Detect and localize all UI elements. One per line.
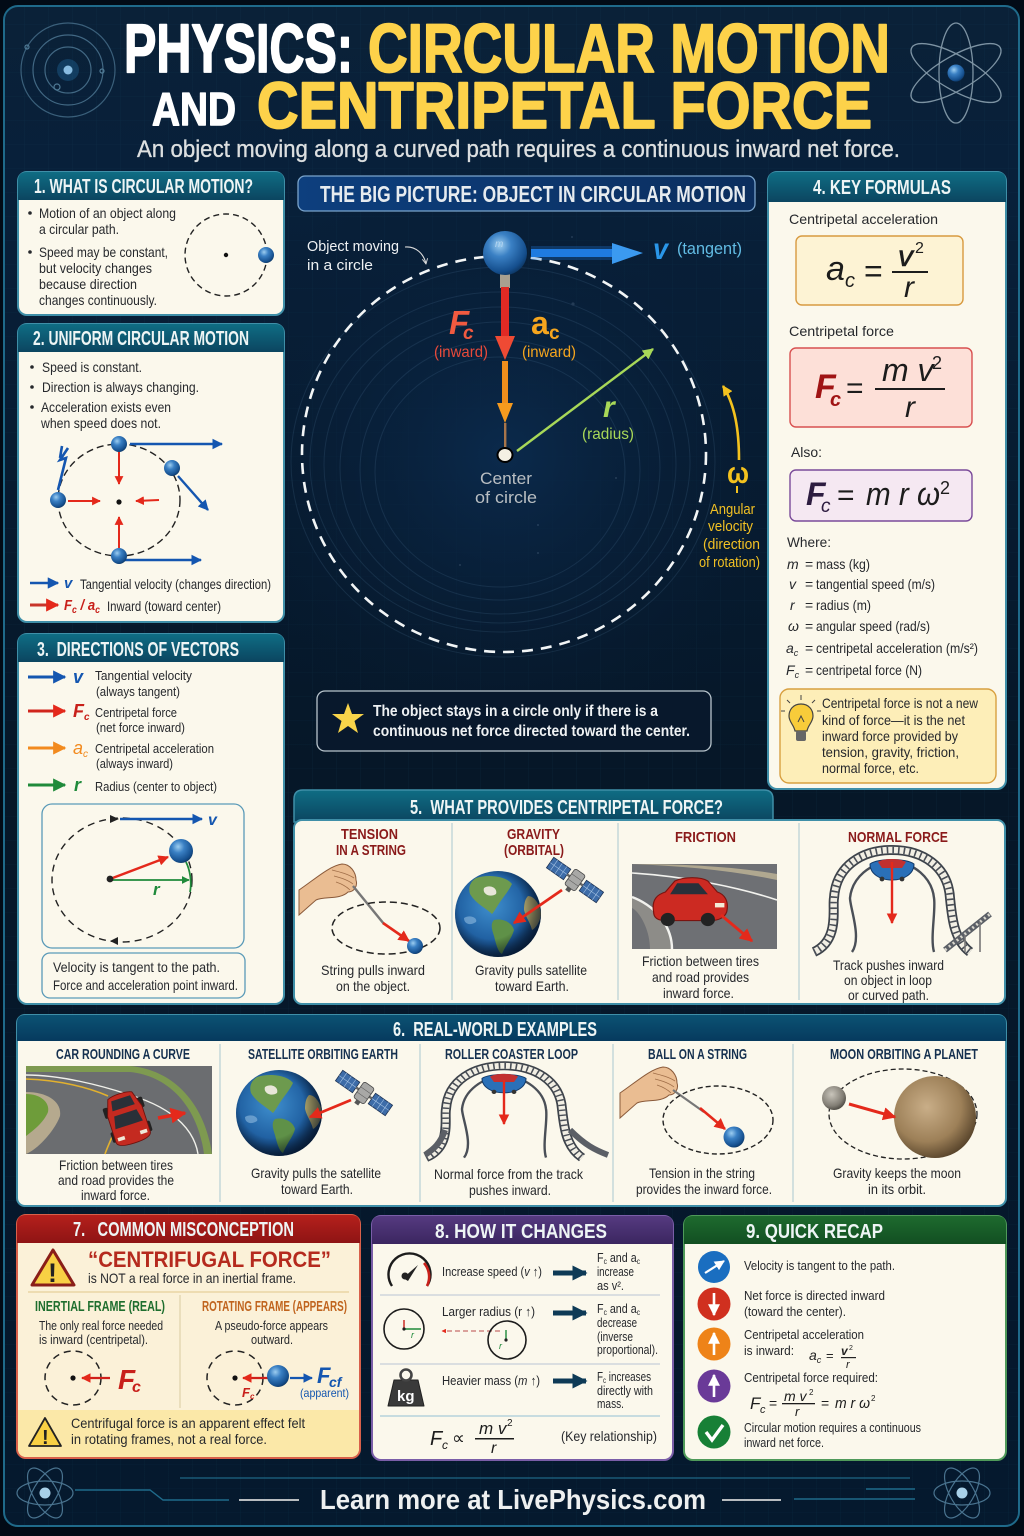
panel: the big picture <box>291 176 760 751</box>
variable definitions: v <box>789 576 797 592</box>
heading 8: 8. HOW IT CHANGES <box>435 1221 607 1243</box>
key relationship formula: m v <box>479 1419 508 1438</box>
panel 9: quick recap <box>684 1216 1006 1460</box>
example: car: Friction between tires <box>59 1157 173 1173</box>
vector legend: Centripetal force <box>95 705 177 720</box>
text block 1: but velocity changes <box>39 260 152 276</box>
text block 1: Motion of an object along <box>39 205 176 221</box>
icon: atom right <box>934 1463 990 1523</box>
recap 4: force: 2 <box>871 1394 876 1403</box>
row: radius <box>384 1301 658 1359</box>
rotating frame: c <box>250 1392 255 1401</box>
key relationship formula: (Key relationship) <box>561 1428 657 1444</box>
label: ac <box>522 305 576 361</box>
angular velocity: velocity <box>708 518 753 535</box>
formula box: force: 2 <box>932 353 942 373</box>
example: roller coaster: pushes inward. <box>469 1182 551 1198</box>
label: Fc: c <box>463 323 474 344</box>
vector legend: Centripetal acceleration <box>95 741 214 756</box>
variable definitions: = <box>805 618 813 634</box>
example: car <box>26 1046 212 1203</box>
row: speed: as v². <box>597 1278 624 1293</box>
recap 5: check: inward net force. <box>744 1435 824 1450</box>
vector legend: a <box>73 738 83 758</box>
angular velocity: ω <box>727 457 749 490</box>
dashed circular path <box>302 256 706 652</box>
text block 1 <box>28 205 176 308</box>
recap 5: check <box>698 1416 921 1450</box>
recap 4: force: = <box>821 1395 829 1411</box>
formula box: acceleration <box>796 236 963 305</box>
angular velocity: Angular <box>710 501 755 518</box>
column: friction: and road provides <box>652 969 749 985</box>
radius arrow <box>517 349 653 451</box>
column: friction <box>632 829 777 1001</box>
column: friction: FRICTION <box>675 829 736 846</box>
inertial frame: The only real force needed <box>39 1318 163 1333</box>
rotating frame: ROTATING FRAME (APPEARS) <box>202 1298 347 1315</box>
vector legend <box>28 667 217 795</box>
vector diagram <box>42 804 244 948</box>
vector legend: Tangential velocity <box>95 668 192 683</box>
recap 2: net force: Net force is directed inward <box>744 1288 885 1303</box>
vector diagram: r <box>153 880 161 899</box>
row: mass: increases <box>606 1369 651 1384</box>
text block 2: Speed is constant. <box>42 359 142 375</box>
example: satellite: SATELLITE ORBITING EARTH <box>248 1046 398 1063</box>
caption box: Velocity is tangent to the path. <box>53 959 220 975</box>
recap 4: force: F <box>750 1394 762 1413</box>
warning note: Centrifugal force is an apparent effect felt <box>71 1415 305 1431</box>
text block 1: because direction <box>39 276 137 292</box>
text block 2 <box>30 359 199 431</box>
text block 1: Speed may be constant, <box>39 244 168 260</box>
formula box: omega: c <box>821 496 831 517</box>
legend: c <box>72 605 77 616</box>
recap 1: velocity: Velocity is tangent to the path. <box>744 1258 895 1273</box>
example: car: CAR ROUNDING A CURVE <box>56 1046 190 1063</box>
icon: atom left <box>17 1463 73 1523</box>
example: moon: in its orbit. <box>868 1181 926 1197</box>
formula box: force: m v <box>882 352 936 388</box>
label: ac: a <box>531 305 549 341</box>
angular velocity <box>699 386 760 571</box>
title: CENTRIPETAL FORCE <box>257 68 872 142</box>
rotating frame: outward. <box>251 1332 293 1347</box>
row: speed: Increase speed (v ↑) <box>442 1264 542 1279</box>
heading 5: 5. WHAT PROVIDES CENTRIPETAL FORCE? <box>410 797 723 819</box>
callout: stays in a circle <box>317 691 711 751</box>
heading 4: 4. KEY FORMULAS <box>813 177 951 199</box>
row: mass: mass. <box>597 1396 624 1411</box>
recap 4: force: Centripetal force required: <box>744 1370 878 1385</box>
warning note: in rotating frames, not a real force. <box>71 1431 267 1447</box>
column: gravity <box>455 826 605 994</box>
row: mass: kg <box>397 1388 415 1405</box>
key relationship formula <box>430 1418 657 1457</box>
label: ac: (inward) <box>522 344 576 361</box>
key relationship formula: 2 <box>507 1418 513 1429</box>
vector legend: F <box>73 701 84 721</box>
faint rings and stars <box>291 236 715 657</box>
title <box>124 10 890 142</box>
recap 4: force: 2 <box>809 1388 814 1397</box>
variable definitions: F <box>786 662 795 678</box>
force arrow <box>495 272 515 360</box>
vector legend: (net force inward) <box>96 720 185 735</box>
recap 4: force: c <box>760 1404 766 1416</box>
variable definitions: centripetal acceleration (m/s²) <box>816 640 978 656</box>
label: also: Also: <box>791 444 822 460</box>
footer <box>17 1463 990 1523</box>
vector legend: r <box>74 775 82 795</box>
inertial frame: is inward (centripetal). <box>39 1332 148 1347</box>
warning note: ! <box>42 1427 49 1449</box>
formula box: acceleration: = <box>864 253 883 289</box>
legend: Tangential velocity (changes direction) <box>80 576 271 592</box>
column: tension: TENSION <box>341 826 398 843</box>
misconception statement <box>88 1247 331 1286</box>
row: radius: Larger radius (r ↑) <box>442 1304 535 1319</box>
column: normal force: on object in loop <box>844 972 932 988</box>
recap 3: acceleration: 2 <box>849 1345 853 1352</box>
column: tension <box>299 826 440 994</box>
callout: stays in a circle: The object stays in a circle only if there is a <box>373 703 658 720</box>
caption box <box>42 953 245 998</box>
vector legend: c <box>83 749 88 760</box>
rotating frame: F <box>317 1363 331 1388</box>
subtitle: An object moving along a curved path requires a continuous inward net force. <box>137 136 900 163</box>
row: radius: and a <box>607 1301 637 1316</box>
callout text: Centripetal force is not a new <box>822 695 979 711</box>
row: mass <box>388 1369 653 1411</box>
formula box: force: r <box>905 391 916 424</box>
row: radius: r <box>499 1341 503 1351</box>
text block 1: changes continuously. <box>39 292 157 308</box>
variable definitions: = <box>805 640 813 656</box>
variable definitions: = <box>805 662 813 678</box>
rotating frame: cf <box>329 1374 343 1390</box>
label: Fc: F <box>449 304 470 341</box>
variable definitions: c <box>794 648 799 658</box>
warning icon: ! <box>48 1258 57 1288</box>
example: ball on a string <box>620 1046 773 1197</box>
inertial frame: F <box>118 1364 136 1395</box>
rotating frame: A pseudo-force appears <box>215 1318 328 1333</box>
formula box: acceleration: 2 <box>915 240 924 257</box>
row: speed <box>388 1250 640 1293</box>
diagram: four positions with velocity and force arrows <box>50 436 222 564</box>
center of circle: of circle <box>475 488 537 507</box>
formula box: acceleration: a <box>826 250 845 288</box>
footer text: Learn more at LivePhysics.com <box>320 1484 706 1515</box>
heading 6: 6. REAL-WORLD EXAMPLES <box>393 1019 597 1041</box>
example: car: inward force. <box>81 1187 150 1203</box>
recap 3: acceleration: a <box>809 1347 817 1363</box>
column: gravity: toward Earth. <box>495 978 569 994</box>
vector legend: v <box>73 667 84 687</box>
example: satellite: Gravity pulls the satellite <box>251 1165 381 1181</box>
column: gravity: GRAVITY <box>507 826 560 843</box>
misconception statement: is NOT a real force in an inertial frame. <box>88 1270 296 1286</box>
panel 1: what is circular motion <box>18 172 284 315</box>
variable definitions: angular speed (rad/s) <box>816 618 930 634</box>
legend: v <box>64 575 74 592</box>
recap 3: acceleration: v <box>841 1344 849 1358</box>
heading 9: 9. QUICK RECAP <box>746 1221 883 1243</box>
rotating frame <box>202 1298 349 1405</box>
label: object moving: in a circle <box>307 257 373 274</box>
text block 2: Acceleration exists even <box>41 399 171 415</box>
rotating frame: (apparent) <box>300 1386 349 1400</box>
formula box: force: = <box>846 372 864 405</box>
row: speed: and a <box>607 1250 637 1265</box>
key relationship formula: ∝ <box>452 1428 465 1448</box>
key relationship formula: r <box>491 1440 497 1457</box>
callout text: normal force, etc. <box>822 760 919 776</box>
row: radius: r <box>411 1330 415 1340</box>
variable definitions: mass (kg) <box>816 556 870 572</box>
formula box: omega: 2 <box>940 478 950 498</box>
column: tension: String pulls inward <box>321 962 425 978</box>
center of circle: Center <box>480 469 532 488</box>
angular velocity: (direction <box>703 536 760 553</box>
formula box: force <box>790 348 972 427</box>
variable definitions: radius (m) <box>816 597 871 613</box>
formula box: omega: F <box>806 476 827 512</box>
heading big picture <box>298 176 755 211</box>
callout text: inward force provided by <box>822 728 958 744</box>
formula box: acceleration: v <box>898 240 915 273</box>
variable definitions: a <box>786 640 794 656</box>
variable definitions: r <box>790 597 796 613</box>
formula box: omega: = <box>837 479 855 512</box>
row: mass: Heavier mass (m ↑) <box>442 1373 540 1388</box>
panel 6: real-world examples <box>17 1015 1006 1206</box>
panel 5: what provides centripetal force <box>294 790 1005 1004</box>
callout text: kind of force—it is the net <box>822 712 965 728</box>
variable definitions: ω <box>788 618 799 634</box>
center of circle <box>475 448 537 507</box>
row: speed: c <box>604 1257 607 1266</box>
inertial frame: INERTIAL FRAME (REAL) <box>35 1298 165 1315</box>
text block 1: a circular path. <box>39 221 119 237</box>
text block 2: Direction is always changing. <box>42 379 199 395</box>
label: centripetal force: Centripetal force <box>789 323 894 339</box>
callout text: tension, gravity, friction, <box>822 744 959 760</box>
variable definitions: Where: <box>787 534 831 550</box>
heading 3: 3. DIRECTIONS OF VECTORS <box>37 639 239 661</box>
recap 2: net force <box>698 1288 885 1320</box>
legend: Inward (toward center) <box>107 598 221 614</box>
recap 5: check: Circular motion requires a continuous <box>744 1420 921 1435</box>
label: object moving: Object moving <box>307 238 399 255</box>
row: radius: c <box>604 1308 607 1317</box>
callout: stays in a circle: continuous net force directed toward the center. <box>373 723 690 740</box>
decorative orbit icon top left <box>21 23 115 117</box>
callout: not a new force <box>780 689 996 783</box>
column: gravity: (ORBITAL) <box>504 842 564 859</box>
text block 2: when speed does not. <box>40 415 161 431</box>
vector diagram: v <box>208 812 218 829</box>
variable definitions: = <box>805 597 813 613</box>
example: satellite: toward Earth. <box>281 1181 353 1197</box>
example: moon <box>822 1046 978 1197</box>
title: PHYSICS: <box>124 10 353 87</box>
row: speed: c <box>637 1257 640 1266</box>
icon: light bulb <box>781 695 821 741</box>
example: ball on a string: provides the inward force. <box>636 1181 772 1197</box>
recap 3: acceleration: = <box>826 1348 834 1363</box>
recap 4: force <box>698 1370 878 1419</box>
variable definitions: centripetal force (N) <box>816 662 922 678</box>
legend: c <box>95 605 100 616</box>
row: mass: F <box>597 1369 605 1384</box>
recap 3: acceleration: Centripetal acceleration <box>744 1327 864 1342</box>
column: gravity: Gravity pulls satellite <box>475 962 587 978</box>
vector legend: Radius (center to object) <box>95 779 217 794</box>
row: mass: c <box>603 1376 606 1385</box>
decorative atom icon top right <box>903 23 1009 123</box>
misconception statement: “CENTRIFUGAL FORCE” <box>88 1247 331 1272</box>
formula box: omega: m r ω <box>866 476 940 512</box>
column: tension: IN A STRING <box>336 842 406 859</box>
variable definitions: m <box>787 556 799 572</box>
heading 1: 1. WHAT IS CIRCULAR MOTION? <box>34 176 253 198</box>
variable definitions: c <box>795 670 800 680</box>
variable definitions: = <box>805 556 813 572</box>
label: object moving <box>307 238 426 274</box>
angular velocity: of rotation) <box>699 554 760 571</box>
caption box: Force and acceleration point inward. <box>53 977 238 993</box>
heading 2: 2. UNIFORM CIRCULAR MOTION <box>33 328 249 350</box>
recap 4: force: m r ω <box>835 1395 870 1412</box>
inertial frame: c <box>132 1379 141 1396</box>
example: ball on a string: Tension in the string <box>649 1165 755 1181</box>
label: ac: c <box>549 323 560 344</box>
row: radius: (inverse <box>597 1329 633 1344</box>
column: friction: Friction between tires <box>642 953 759 969</box>
formula box: force: F <box>815 368 837 406</box>
column: normal force: Track pushes inward <box>833 957 944 973</box>
recap 4: force: = <box>769 1395 777 1411</box>
recap 2: net force: (toward the center). <box>744 1304 846 1319</box>
formula box: omega <box>790 470 972 521</box>
column: normal force: or curved path. <box>848 987 929 1003</box>
warning icon <box>32 1250 74 1288</box>
recap 4: force: m v <box>784 1388 808 1404</box>
row: radius: decrease <box>597 1315 637 1330</box>
rotating frame: F <box>242 1385 250 1400</box>
recap 3: acceleration: is inward: <box>744 1343 794 1358</box>
label: r <box>582 391 634 443</box>
legend: / a <box>77 597 95 614</box>
velocity arrow <box>531 233 742 266</box>
recap 1: velocity <box>698 1251 895 1283</box>
example: roller coaster: ROLLER COASTER LOOP <box>445 1046 578 1063</box>
label: Fc <box>434 304 488 361</box>
heading big picture: THE BIG PICTURE: OBJECT IN CIRCULAR MOTION <box>320 181 746 207</box>
vector legend: (always inward) <box>96 756 173 771</box>
variable definitions: tangential speed (m/s) <box>816 576 935 592</box>
row: radius: proportional). <box>597 1342 658 1357</box>
panel 3: directions of vectors <box>18 634 284 1004</box>
velocity arrow: (tangent) <box>677 239 742 258</box>
formula box: acceleration: c <box>845 270 855 292</box>
example: moon: Gravity keeps the moon <box>833 1165 961 1181</box>
panel 8: how it changes <box>372 1216 673 1460</box>
formula box: force: c <box>830 389 841 411</box>
label: Fc: (inward) <box>434 344 488 361</box>
row: mass: directly with <box>597 1383 653 1398</box>
vector legend: c <box>84 712 90 723</box>
example: satellite <box>236 1046 398 1197</box>
example: car: and road provides the <box>58 1172 174 1188</box>
column: friction: inward force. <box>663 985 734 1001</box>
label: centripetal acceleration: Centripetal acceleration <box>789 211 938 227</box>
key relationship formula: c <box>442 1438 448 1452</box>
object ball: m <box>495 239 503 250</box>
variable definitions <box>786 534 978 680</box>
inertial frame <box>35 1298 165 1405</box>
example: ball on a string: BALL ON A STRING <box>648 1046 747 1063</box>
recap 3: acceleration: r <box>846 1359 851 1371</box>
example: roller coaster <box>425 1046 608 1198</box>
legend <box>30 575 271 616</box>
key relationship formula: F <box>430 1428 444 1450</box>
diagram: circle with ball <box>185 214 274 296</box>
recap 4: force: r <box>795 1404 800 1419</box>
label: r: (radius) <box>582 426 634 443</box>
legend: F <box>64 597 73 614</box>
title: CIRCULAR MOTION <box>368 10 890 87</box>
velocity arrow: v <box>653 233 670 266</box>
column: tension: on the object. <box>336 978 410 994</box>
warning note <box>18 1410 359 1457</box>
row: speed: F <box>597 1250 605 1265</box>
row: speed: increase <box>597 1264 634 1279</box>
row: radius: F <box>597 1301 605 1316</box>
column: normal force <box>814 829 990 1003</box>
recap 3: acceleration <box>698 1327 864 1371</box>
row: radius: c <box>637 1308 640 1317</box>
panel 4: key formulas <box>768 172 1006 789</box>
column: normal force: NORMAL FORCE <box>848 829 948 846</box>
callout text <box>822 695 979 776</box>
heading 7: 7. COMMON MISCONCEPTION <box>73 1219 294 1241</box>
panel 7: common misconception <box>17 1215 360 1458</box>
recap 3: acceleration: c <box>817 1355 822 1365</box>
acceleration arrow <box>497 361 513 449</box>
formula box: acceleration: r <box>904 271 915 304</box>
example: roller coaster: Normal force from the track <box>434 1166 584 1182</box>
vector legend: (always tangent) <box>96 684 180 699</box>
variable definitions: = <box>805 576 813 592</box>
object ball <box>483 231 527 275</box>
title: AND <box>152 83 236 135</box>
label: r: r <box>603 391 617 424</box>
panel 2: uniform circular motion <box>18 324 284 622</box>
